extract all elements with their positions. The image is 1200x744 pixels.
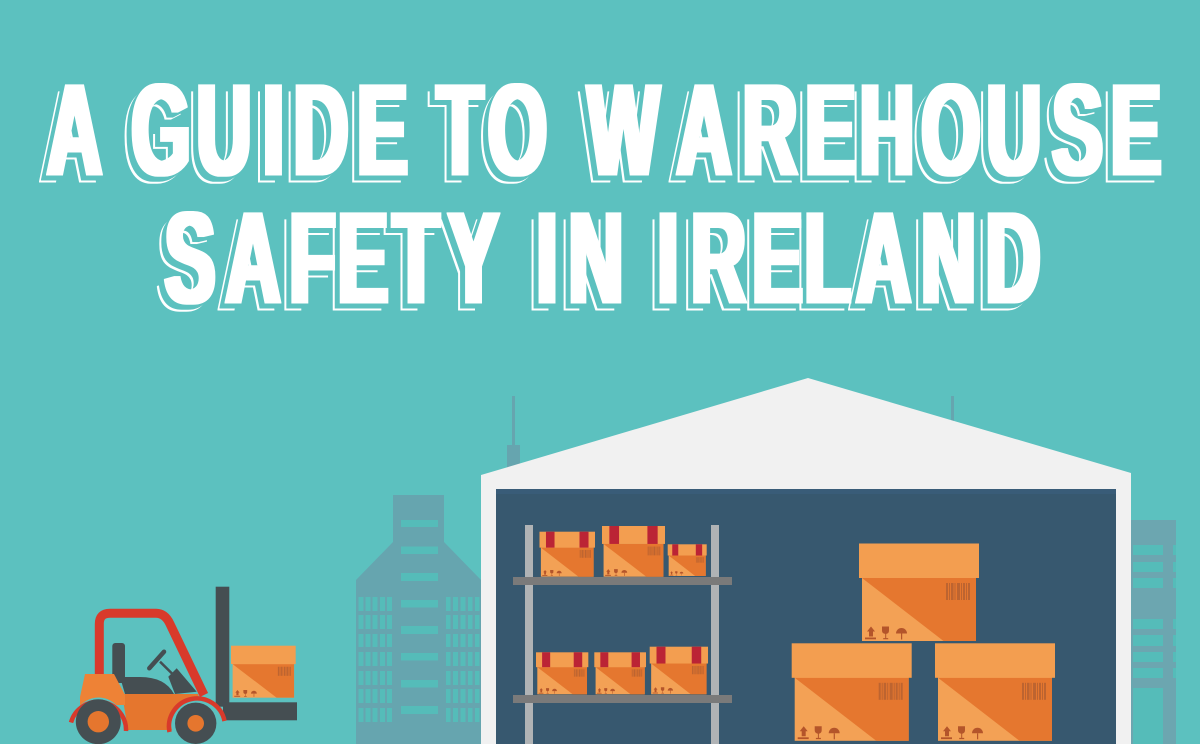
shelf box 1 bbox=[540, 532, 595, 577]
body bbox=[80, 674, 208, 730]
large box bottom right bbox=[935, 643, 1055, 741]
mast bbox=[216, 587, 229, 707]
left skyline building bbox=[356, 396, 520, 744]
fork bbox=[223, 702, 297, 720]
shelf box 6 bbox=[650, 647, 708, 694]
steering bbox=[149, 652, 197, 694]
shelf box 4 bbox=[536, 652, 588, 694]
rear wheel bbox=[71, 698, 126, 744]
shelf box 5 bbox=[594, 652, 646, 694]
shelf box 3 bbox=[668, 544, 707, 576]
title line 2: SAFETY IN IRELAND bbox=[165, 184, 1040, 331]
shelf box 2 bbox=[602, 526, 665, 577]
warehouse shell bbox=[481, 378, 1131, 744]
cabin frame bbox=[99, 613, 204, 695]
front wheel bbox=[169, 697, 224, 744]
title bbox=[47, 56, 1161, 331]
shelving unit bbox=[513, 525, 732, 744]
large box bottom left bbox=[792, 643, 912, 741]
seat bbox=[112, 643, 174, 694]
forklift box bbox=[231, 646, 296, 698]
warehouse interior bbox=[496, 489, 1116, 744]
right skyline building bbox=[951, 396, 1176, 744]
warehouse bbox=[481, 378, 1131, 744]
forklift bbox=[71, 587, 297, 744]
large box top bbox=[859, 544, 979, 641]
title line 1: A GUIDE TO WAREHOUSE bbox=[47, 56, 1161, 203]
